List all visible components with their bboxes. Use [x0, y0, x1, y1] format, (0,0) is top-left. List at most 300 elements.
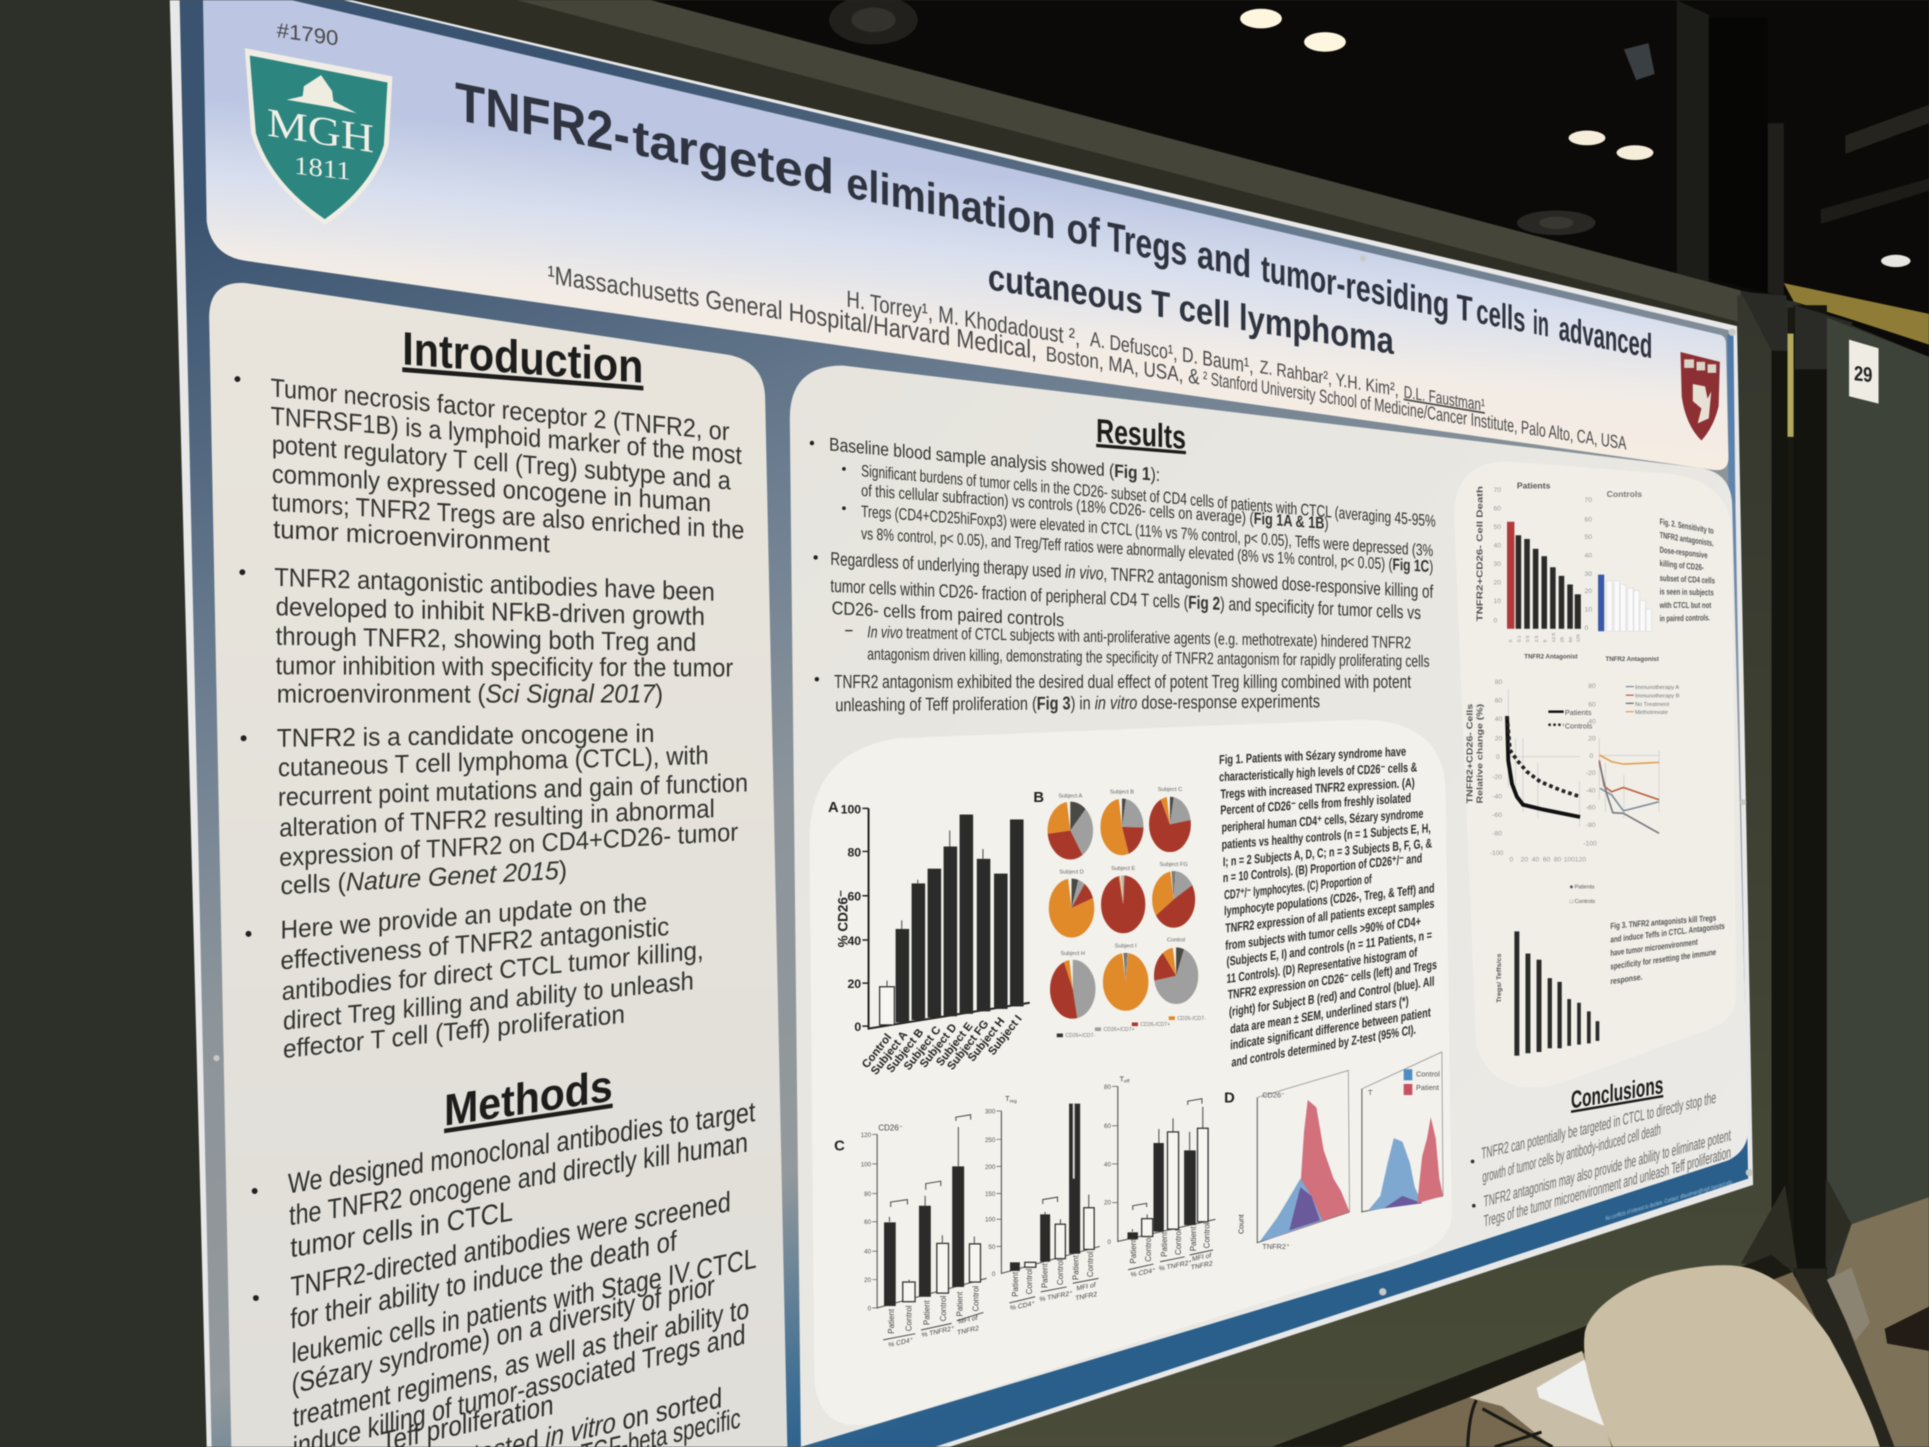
chart: CD26-: Control [939, 1295, 948, 1321]
Figure 1 caption: patients vs healthy controls (n = 1 Subjects E, H, [1222, 820, 1431, 852]
icon: MGH shield logo: 1811 [294, 151, 351, 186]
bar chart: Fig 2 patients: 50 [1568, 637, 1574, 642]
affiliations [547, 259, 1627, 454]
Figure 2 caption: TNFR2 antagonists. [1660, 530, 1714, 548]
pie titles: Subject H [1061, 951, 1085, 957]
Figure 1 caption: data are mean ± SEM, underlined stars (*) [1230, 993, 1409, 1036]
pie charts B: CD26/CD7 proportions [1033, 787, 1206, 1039]
heading: Conclusions: Conclusions [1571, 1072, 1663, 1115]
text block: methods bullets: (Sézary syndrome) on a diversity of prior [292, 1270, 715, 1401]
title: Tregs [1107, 213, 1187, 275]
text block: conclusions bullets: growth of tumor cells by antibody-induced cell death [1482, 1120, 1661, 1186]
chart: CD26-: 60 [864, 1219, 872, 1226]
pie titles: Subject I [1115, 943, 1137, 949]
text block: methods bullets: We designed monoclonal antibodies to target [288, 1096, 755, 1200]
pie titles: Subject D [1059, 870, 1084, 876]
chart: Teff: 0 [1107, 1239, 1111, 1246]
bar chart A: percent CD26-: A [828, 800, 839, 816]
chart: CD26-: Control [905, 1305, 914, 1331]
Figure 1 caption: lymphocyte populations (CD26-, Treg, & Teff) and [1224, 880, 1435, 918]
line chart: patients vs controls relative change: 100 [1564, 856, 1575, 863]
Figure 2 caption: is seen in subjects [1660, 586, 1714, 597]
bar chart: Fig 2 patients: 30 [1493, 561, 1501, 568]
heading: Methods: Methods [444, 1062, 613, 1136]
pie: Subject C [1159, 811, 1180, 838]
text block: introduction bullets: TNFR2 antagonistic antibodies have been [274, 564, 715, 607]
text block: introduction bullets: tumor inhibition with specificity for the tumor [276, 652, 734, 683]
line chart: treatment groups: -20 [1586, 770, 1596, 777]
line chart: patients vs controls relative change: -60 [1492, 812, 1502, 819]
chart: CD26-: 120 [861, 1132, 872, 1139]
text block: introduction bullets: direct Treg killing and ability to unleash [283, 967, 694, 1036]
bar chart: Fig 2 patients: 125 [1576, 634, 1582, 642]
text block: introduction bullets [234, 374, 748, 1064]
bar chart: Fig 2 patients: 5 [1542, 639, 1548, 642]
chart: Teff: Control [1144, 1236, 1153, 1262]
panel: Introduction and Methods [209, 283, 787, 1447]
bar chart: Fig 2 controls: 10 [1585, 607, 1592, 614]
chart: CD26-: 100 [861, 1161, 872, 1168]
title: tumor-residing [1261, 247, 1449, 326]
histogram: Tregs: Control [1416, 1070, 1440, 1079]
chart: Treg: Control [1056, 1259, 1065, 1285]
chart: Teff: 20 [1104, 1200, 1111, 1207]
pie legend: CD26+/CD7- [1065, 1033, 1095, 1039]
bar chart: Fig 2 patients: 50 [1493, 524, 1501, 531]
text block: methods bullets: TNFR2-directed antibodies were screened [290, 1186, 731, 1304]
affiliations: ² Stanford University School of Medicine/Cancer Institute, Palo Alto, CA, USA [1203, 367, 1627, 454]
chart: Treg: reg [1010, 1098, 1017, 1104]
line chart: patients vs controls relative change: Relative change (%) [1474, 704, 1484, 803]
line chart: patients vs controls relative change: 60 [1543, 856, 1550, 863]
pie titles: Subject A [1058, 793, 1082, 799]
text block: methods bullets: tumor cells in CTCL [290, 1196, 513, 1264]
chart: Teff: 80 [1104, 1084, 1111, 1091]
line chart: patients vs controls relative change: Patients [1565, 708, 1592, 717]
carpet floor and dark board foot [1272, 1179, 1929, 1447]
pie legend: CD26-/CD7- [1177, 1016, 1206, 1022]
bar chart: Tregs/Teffs ratio: ■ Patients [1570, 884, 1595, 890]
title: targeted [632, 109, 834, 205]
chart: CD26-: MFI of [958, 1315, 978, 1326]
bar chart A: percent CD26-: Subject D [918, 1022, 959, 1070]
panel: Figure 1 [809, 720, 1452, 1425]
line chart: patients vs controls relative change: TNFR2+CD26- Cells [1465, 704, 1475, 803]
pie titles: Subject E [1111, 866, 1136, 872]
Figure 1 caption: n = 10 Controls). (B) Proportion of CD26⁺/⁻ and [1223, 850, 1422, 885]
pie: Subject A [1059, 816, 1082, 845]
pie titles: Subject C [1158, 787, 1182, 793]
bar chart: Fig 2 patients: 0 [1508, 639, 1514, 642]
line chart: patients vs controls relative change: 80 [1495, 679, 1502, 686]
chart: Treg: 150 [985, 1191, 996, 1198]
title: in [1533, 304, 1549, 345]
title: cells [1476, 293, 1525, 340]
bar chart A: percent CD26-: 100 [841, 802, 861, 816]
chart: CD26-: 0 [868, 1305, 872, 1312]
title: TNFR2- [455, 71, 630, 166]
text block: results bullets: Baseline blood sample analysis showed (Fig 1): [829, 433, 1160, 485]
chart: Treg: 200 [985, 1164, 996, 1171]
section: Conclusions [1471, 1072, 1731, 1231]
text block: methods bullets: the TNFR2 oncogene and directly kill human [289, 1127, 748, 1232]
chart: CD26-: TNFR2 [957, 1325, 979, 1337]
line chart: treatment groups: Immunotherapy B [1635, 694, 1680, 700]
Figure 1 caption: TNFR2 expression on CD26⁻ cells (left) and Tregs [1228, 957, 1437, 1002]
bar chart: Fig 2 patients: 12.5 [1551, 632, 1557, 642]
poster pins [213, 255, 1753, 1296]
chart: Teff: Control [1174, 1229, 1183, 1255]
bar chart: Fig 2 patients: 25 [1560, 637, 1566, 642]
bar chart A: percent CD26-: Subject C [902, 1024, 943, 1073]
number plate 29 [1849, 340, 1879, 404]
bar chart A: percent CD26-: 20 [847, 977, 861, 991]
heading: Results: Results [1096, 413, 1186, 457]
affiliations: ¹Massachusetts General Hospital/Harvard Medical, [547, 259, 1037, 365]
histogram: CD26- cells: Count [1237, 1214, 1246, 1234]
Figure 3 caption: Fig 3. TNFR2 antagonists kill Tregs [1610, 912, 1716, 931]
chart: Treg: MFI of [1076, 1282, 1096, 1293]
text block: introduction bullets: Tumor necrosis factor receptor 2 (TNFR2, or [271, 374, 730, 447]
histogram: CD26- cells [1237, 1070, 1350, 1251]
text block: conclusions bullets [1471, 1089, 1731, 1231]
bar chart: Fig 2 controls [1585, 489, 1659, 663]
bar chart: Fig 2 patients: 2.5 [1534, 635, 1540, 642]
bar chart A: percent CD26-: Control [860, 1032, 894, 1071]
chart: Teff [1104, 1074, 1215, 1279]
pie: Control [1165, 962, 1187, 990]
bar chart A: percent CD26-: Subject H [966, 1016, 1007, 1064]
histogram: Tregs: Patient [1416, 1083, 1439, 1092]
Figure 1 caption: (right) for Subject B (red) and Control (blue). All [1229, 974, 1434, 1019]
chart: CD26-: 80 [864, 1191, 872, 1198]
chart: CD26-: CD26⁻ [878, 1124, 903, 1133]
line chart: patients vs controls relative change: 20 [1495, 736, 1502, 743]
chart: Teff: 60 [1104, 1123, 1111, 1130]
Figure 1 caption: from subjects with tumor cells >90% of CD4+ [1225, 913, 1421, 953]
chart: Teff: MFI of [1192, 1252, 1211, 1263]
Figure 2 caption: subset of CD4 cells [1660, 573, 1715, 586]
panel: Figures 2 and 3 [1454, 461, 1736, 1087]
Figure 2 caption: in paired controls. [1660, 612, 1710, 623]
bar chart: Fig 2 patients [1474, 481, 1582, 660]
pie legend: CD26-/CD7+ [1140, 1022, 1170, 1028]
histogram: CD26- cells: TNFR2⁺ [1262, 1242, 1290, 1251]
histograms D: TNFR2 expression: D [1224, 1090, 1235, 1106]
line chart: patients vs controls relative change: -20 [1492, 774, 1502, 781]
pie titles: Subject FG [1160, 862, 1188, 868]
bar charts C: lymphocyte populations [834, 1074, 1215, 1349]
chart: Treg: T [1005, 1094, 1010, 1103]
pie: Subject D [1060, 893, 1083, 923]
bar chart: Fig 2 controls: 0 [1585, 625, 1589, 632]
chart: Teff: TNFR2 [1191, 1260, 1213, 1272]
text block: introduction bullets: recurrent point mutations and gain of function [278, 769, 748, 812]
text block: introduction bullets: TNFR2 is a candidate oncogene in [277, 720, 654, 753]
Figure 3 caption: response. [1610, 972, 1642, 986]
text block: results bullets: Tregs (CD4+CD25hiFoxp3) were elevated in CTCL (11% vs 7% control, p< 0.05), Teffs were depressed (3% [861, 502, 1433, 560]
title: T [1457, 286, 1473, 330]
bar chart: Fig 2 controls: 20 [1585, 588, 1592, 595]
line chart: treatment groups: No Treatment [1635, 702, 1670, 708]
text block: results bullets: of this cellular subfraction) vs controls (18% CD26- cells on average) (Fig 1A & 1B) [861, 481, 1329, 533]
line chart: treatment groups: Immunotherapy A [1635, 685, 1679, 691]
chart: Teff: % TNFR2⁺ [1159, 1259, 1192, 1273]
line chart: patients vs controls relative change: Controls [1565, 721, 1593, 730]
text block: methods bullets [252, 1096, 757, 1447]
text block: introduction bullets: cells (Nature Genet 2015) [280, 856, 567, 900]
bar chart A: percent CD26-: 40 [847, 934, 861, 948]
heading: Introduction: Introduction [402, 322, 643, 393]
bar chart: Tregs/Teffs ratio: Tregs/ Teffs/cs [1496, 953, 1503, 1003]
Figure 1 caption: indicate significant difference between patient [1230, 1004, 1431, 1052]
bar charts C: lymphocyte populations: C [834, 1138, 845, 1154]
Figure 1 caption: TNFR2 expression of all patients except samples [1225, 896, 1434, 936]
line chart: patients vs controls relative change: 40 [1532, 856, 1539, 863]
Figure 1 caption: Fig 1. Patients with Sézary syndrome have [1219, 744, 1406, 767]
text block: introduction bullets: Here we provide an update on the [280, 889, 647, 945]
text block: introduction bullets: commonly expressed oncogene in human [272, 460, 711, 518]
line chart: treatment groups: 0 [1589, 753, 1593, 760]
chart: CD26-: 20 [864, 1277, 872, 1284]
line chart: patients vs controls relative change: -100 [1490, 850, 1504, 857]
bar chart: Fig 2 patients: 0.5 [1525, 635, 1531, 642]
Figure 1 caption: Percent of CD26⁻ cells from freshly isolated [1220, 790, 1411, 818]
number plate 29: 29 [1854, 362, 1872, 387]
pie: Subject FG [1163, 885, 1184, 914]
Figure 3 caption: and induce Teffs in CTCL. Antagonists [1610, 921, 1725, 944]
title: and [1197, 232, 1251, 287]
Figure 1 caption: 11 Controls). (D) Representative histogram of [1227, 944, 1418, 986]
text block: introduction bullets: expression of TNFR2 on CD4+CD26- tumor [279, 819, 738, 872]
bar chart: Tregs/Teffs ratio: □ Controls [1570, 899, 1595, 905]
text block: introduction bullets: effectiveness of TNFR2 antagonistic [280, 913, 669, 976]
text block: results bullets: TNFR2 antagonism exhibited the desired dual effect of potent Treg killing combined with potent [834, 671, 1411, 692]
board surface to the right and bottom of the poster [950, 295, 1786, 1447]
Figure 1 caption [1219, 744, 1437, 1070]
line chart: treatment groups: 80 [1588, 683, 1596, 690]
bar chart A: percent CD26-: % CD26⁻ [836, 890, 851, 947]
text block: results bullets: vs 8% control, p< 0.05), and Treg/Teff ratios were abnormally elevated (8% vs 1% control, p< 0.05) (Fig 1C) [861, 524, 1433, 576]
text block: results bullets: CD26- cells from paired controls [832, 597, 1064, 630]
text block: results bullets: tumor cells within CD26- fraction of peripheral CD4 T cells (Fig 2) and specificity for tumor cells vs [830, 575, 1421, 623]
header banner [203, 0, 1728, 470]
text block: introduction bullets: tumor microenvironment [273, 516, 550, 558]
pie charts B: CD26/CD7 proportions: B [1033, 790, 1044, 806]
board post and brackets [1741, 292, 1853, 1277]
bar chart: Fig 2 controls: 40 [1585, 552, 1592, 559]
chart: Teff: % CD4⁺ [1131, 1267, 1156, 1279]
line chart: treatment groups: -80 [1586, 822, 1596, 829]
title: advanced [1559, 310, 1652, 366]
line chart: patients vs controls relative change: 120 [1575, 856, 1586, 863]
pie titles: Subject B [1110, 790, 1134, 796]
line chart: patients vs controls relative change: -40 [1492, 794, 1502, 801]
pie legend: CD26+/CD7+ [1104, 1027, 1134, 1033]
icon: MGH shield logo [245, 48, 392, 225]
line chart: patients vs controls relative change: 60 [1495, 698, 1502, 705]
text block: introduction bullets: microenvironment (Sci Signal 2017) [277, 681, 663, 709]
bar chart A: percent CD26-: Subject E [934, 1020, 976, 1069]
Figure 3 caption: have tumor microenvironment [1610, 937, 1698, 958]
chart: Treg: 50 [988, 1244, 996, 1251]
text block: introduction bullets: antibodies for direct CTCL tumor killing, [282, 937, 704, 1006]
affiliations: Boston, MA, USA, & [1046, 343, 1199, 389]
bar chart: Fig 2 controls: 60 [1585, 517, 1592, 524]
line chart: treatment groups: 40 [1588, 718, 1596, 725]
neighbouring board panel with number [1827, 318, 1929, 1224]
chart: Treg: Patient [1071, 1254, 1080, 1280]
chart: Treg: 250 [985, 1137, 996, 1144]
pie: Subject H [1061, 974, 1084, 1004]
text block: results bullets: unleashing of Teff proliferation (Fig 3) in in vitro dose-response experiments [835, 690, 1320, 715]
text block: introduction bullets: effector T cell (Teff) proliferation [283, 1001, 625, 1064]
chart: Teff: T [1120, 1074, 1124, 1083]
bar chart: Fig 2 controls: 50 [1585, 534, 1592, 541]
authors: D.L. Faustman¹ [1404, 382, 1485, 415]
line chart: patients vs controls relative change [1465, 679, 1593, 863]
chart: CD26-: Patient [887, 1308, 896, 1334]
bar chart: Fig 2 patients: 60 [1493, 506, 1501, 513]
bar chart: Fig 2 controls: TNFR2 Antagonist [1605, 656, 1659, 663]
Figure 1 caption: and controls determined by Z-test (95% CI). [1231, 1022, 1416, 1070]
pie: Subject B [1111, 813, 1133, 841]
text block: results bullets: Regardless of underlying therapy used in vivo, TNFR2 antagonism showed dose-responsive killing of [830, 548, 1434, 602]
text block: introduction bullets: cutaneous T cell lymphoma (CTCL), with [278, 742, 709, 782]
line chart: treatment groups: 20 [1588, 736, 1596, 743]
text block: results bullets: antagonism driven killing, demonstrating the specificity of TNFR2 antagonism for rapidly proliferating cells [867, 645, 1430, 671]
authors: Z. Rahbar², Y.H. Kim², [1260, 356, 1399, 400]
chart: CD26-: Control [972, 1286, 981, 1312]
chart: Treg [985, 1094, 1100, 1312]
histogram: Tregs [1362, 1052, 1443, 1212]
bar chart: Fig 2 patients: 10 [1493, 598, 1501, 605]
line chart: patients vs controls relative change: 0 [1509, 856, 1513, 863]
text block: introduction bullets: tumors; TNFR2 Tregs are also enriched in the [272, 489, 744, 545]
histogram: CD26- cells: CD26⁻ [1262, 1090, 1285, 1099]
pie: Subject E [1112, 890, 1134, 919]
bar chart A: percent CD26-: Subject I [986, 1013, 1025, 1058]
chart: Treg: % CD4⁺ [1010, 1300, 1035, 1312]
line chart: treatment groups: -60 [1586, 805, 1596, 812]
chart: Treg: 300 [985, 1108, 996, 1115]
line chart: patients vs controls relative change: 0 [1496, 754, 1500, 761]
bar chart: Fig 2 patients: 0.1 [1517, 635, 1523, 642]
bar chart: Fig 2 patients: 0 [1493, 618, 1497, 625]
chart: Treg: TNFR2 [1075, 1291, 1097, 1302]
chart: Treg: 0 [992, 1271, 996, 1278]
chart: Treg: Patient [1041, 1263, 1050, 1288]
chart: Teff: 40 [1104, 1161, 1111, 1168]
pie: Subject I [1114, 967, 1137, 996]
chart: Teff: Patient [1160, 1231, 1169, 1257]
line chart: treatment groups: -40 [1586, 787, 1596, 794]
Figure 1 caption: characteristically high levels of CD26⁻ cells & [1219, 759, 1417, 784]
chart: Treg: % TNFR2⁺ [1040, 1290, 1073, 1304]
Figure 1 caption: CD7⁺/⁻ lymphocytes. (C) Proportion of [1224, 871, 1372, 902]
text block: introduction bullets: potent regulatory T cell (Treg) subtype and a [272, 431, 731, 496]
bar chart: Fig 2 patients: Patients [1517, 481, 1551, 491]
chart: Treg: Control [1025, 1268, 1034, 1294]
bar chart: Fig 2 controls: 70 [1585, 497, 1592, 504]
chart: Teff: Control [1202, 1222, 1211, 1248]
text block: introduction bullets: developed to inhibit NFkB-driven growth [276, 593, 705, 631]
title: elimination [846, 158, 1056, 249]
title: of [1067, 204, 1101, 257]
bar chart: Fig 2 patients: 70 [1493, 487, 1501, 494]
text block: results bullets: In vivo treatment of CTCL subjects with anti-proliferative agents (e.g. methotrexate) hindered TNFR2 [867, 622, 1411, 652]
chart: CD26- [861, 1115, 987, 1349]
chart: CD26-: Patient [922, 1299, 931, 1325]
chart: Treg: Patient [1011, 1271, 1020, 1297]
Figure 3 caption [1610, 912, 1725, 986]
icon: MGH shield logo: MGH [267, 100, 374, 162]
chart: CD26-: 40 [864, 1249, 872, 1256]
bar chart: Fig 2 patients: 40 [1493, 543, 1501, 550]
bar chart: Fig 2 patients: TNFR2 Antagonist [1524, 653, 1578, 660]
line chart: patients vs controls relative change: 20 [1521, 856, 1528, 863]
bar chart A: percent CD26-: 60 [847, 890, 861, 904]
line chart: treatment groups: -100 [1583, 840, 1597, 847]
bar chart: Fig 2 controls: Controls [1607, 489, 1642, 499]
bar chart A: percent CD26- [828, 800, 1030, 1077]
line chart: patients vs controls relative change: 80 [1554, 856, 1562, 863]
chart: Teff: Patient [1189, 1226, 1198, 1251]
chart: Treg: 100 [985, 1217, 996, 1224]
line chart: treatment groups: Methotrexate [1635, 710, 1668, 716]
chair with book [1468, 1265, 1880, 1447]
text block: methods bullets: treatment regimens, as well as their ability to [293, 1293, 749, 1434]
chart: Treg: Control [1086, 1251, 1095, 1277]
Figure 1 caption: peripheral human CD4⁺ cells, Sézary syndrome [1222, 806, 1423, 835]
text block: results bullets [810, 433, 1436, 715]
poster number: #1790 [277, 19, 338, 51]
icon: Harvard shield [1680, 352, 1720, 441]
text block: introduction bullets: through TNFR2, showing both Treg and [276, 623, 696, 657]
chart: CD26-: % TNFR2⁺ [921, 1325, 955, 1339]
line chart: patients vs controls relative change: -80 [1492, 830, 1502, 837]
text block: introduction bullets: TNFRSF1B) is a lymphoid marker of the most [271, 403, 742, 470]
line chart: treatment groups: 60 [1588, 701, 1596, 708]
authors: A. Defusco¹, D. Baum¹, [1090, 328, 1254, 378]
chart: CD26-: % CD4⁺ [888, 1337, 914, 1349]
bar chart: Fig 2 controls: 30 [1585, 571, 1592, 578]
text block: methods bullets: leukemic cells in patients with Stage IV CTCL [292, 1243, 757, 1370]
top frame bands of the display board [352, 0, 1741, 326]
text block: conclusions bullets: TNFR2 can potentially be targeted in CTCL to directly stop the [1481, 1089, 1716, 1163]
Figure 2 caption [1659, 516, 1715, 623]
text block: results bullets: Significant burdens of tumor cells in the CD26- subset of CD4 cells of patients with CTCL (averaging 45-95% [861, 461, 1436, 531]
chart: Teff: Patient [1129, 1238, 1138, 1264]
bar chart A: percent CD26-: Subject A [869, 1029, 910, 1077]
dark ceiling with lights [651, 0, 1929, 357]
Figure 3 caption: specificity for resetting the immune [1610, 947, 1716, 972]
line chart: treatment groups [1583, 683, 1680, 847]
pie legend [1057, 1016, 1206, 1039]
Figure 2 caption: Dose-responsive [1660, 545, 1708, 560]
bar chart A: percent CD26-: 0 [854, 1020, 861, 1034]
Figure 1 caption: (Subjects E, I) and controls (n = 11 Patients, n = [1227, 927, 1432, 969]
chart: Teff: eff [1124, 1079, 1130, 1085]
line chart: patients vs controls relative change: 40 [1495, 716, 1502, 723]
panel: Results [790, 366, 1748, 1447]
histogram: Tregs: T [1368, 1088, 1373, 1097]
bar chart A: percent CD26-: Subject FG [945, 1018, 992, 1073]
pie titles: Control [1167, 937, 1185, 943]
disclosure footer: No conflicts of interest to declare. Contact: dfaustman@mgh.harvard.edu [1605, 1179, 1732, 1222]
authors [846, 286, 1485, 415]
bar chart: Tregs/Teffs ratio [1496, 884, 1599, 1056]
